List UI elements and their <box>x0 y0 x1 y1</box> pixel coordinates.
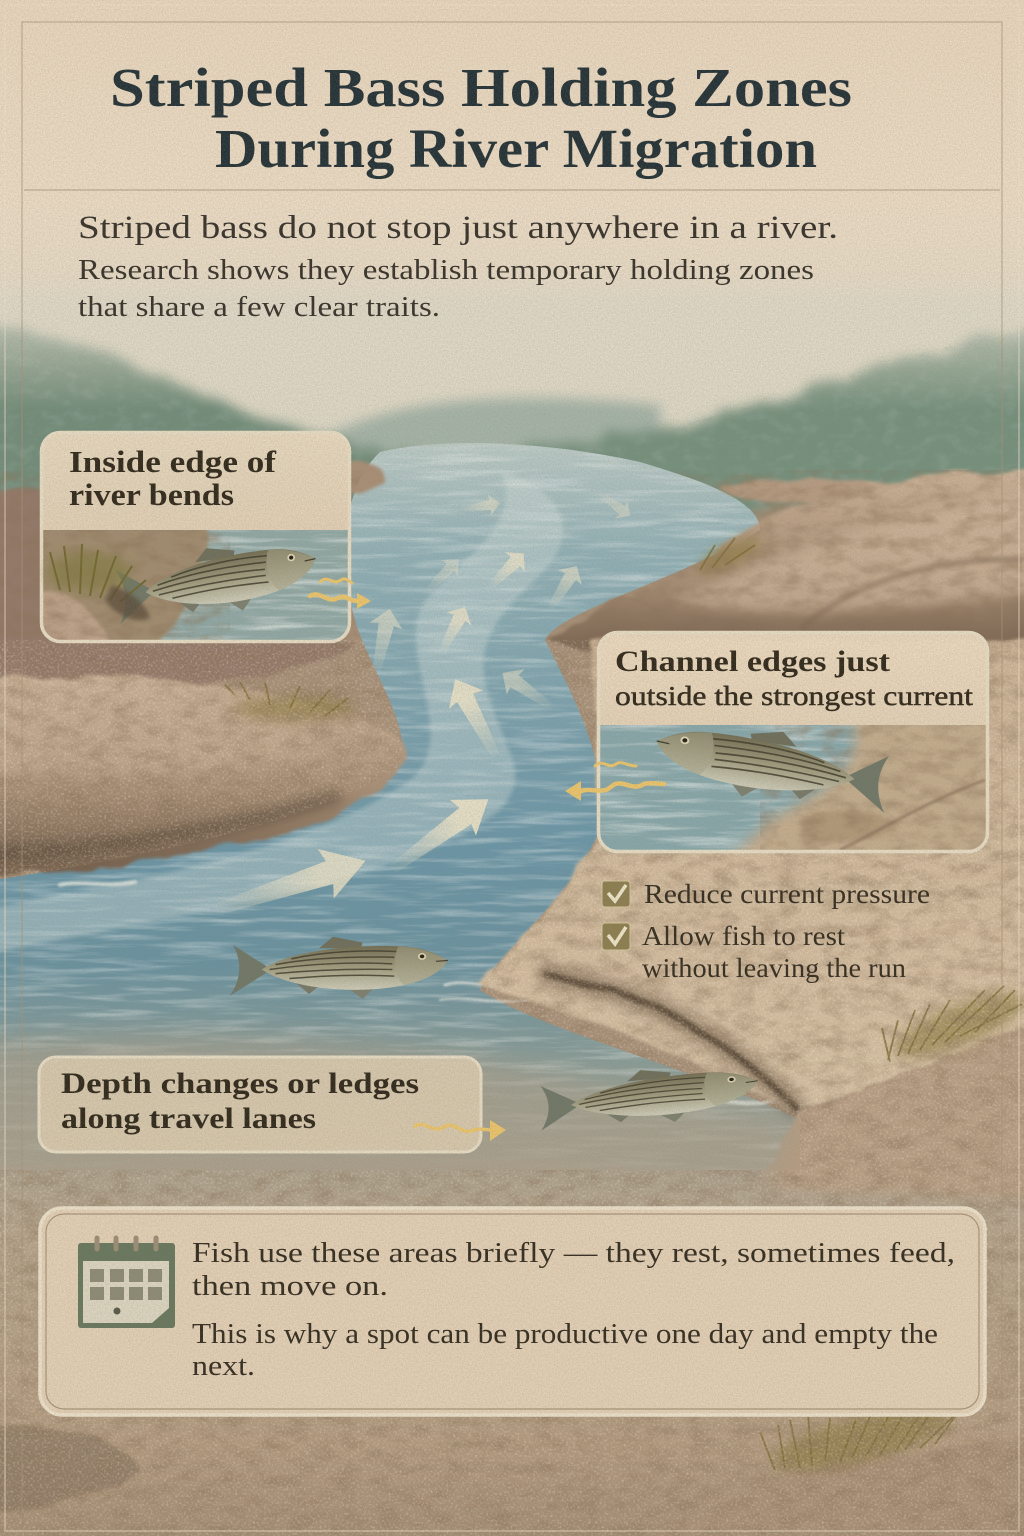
grass masses <box>235 531 1024 1483</box>
panel: fish use these areas briefly <box>40 1208 985 1415</box>
heading: Inside edge of <box>69 444 277 479</box>
panel: channel edges <box>596 630 990 854</box>
body text: This is why a spot can be productive one day and empty the <box>192 1319 938 1350</box>
panel: depth changes or ledges <box>39 1057 481 1152</box>
body text: then move on. <box>192 1270 388 1302</box>
forest: left hillside <box>0 320 420 530</box>
checklist: Allow fish to rest <box>642 921 846 951</box>
body text: next. <box>192 1351 255 1382</box>
far hills <box>320 397 660 455</box>
bottom left rock <box>0 1424 140 1510</box>
right rock highlights <box>670 500 1024 612</box>
icon: calendar <box>78 1238 175 1328</box>
fish <box>112 533 321 628</box>
left shore rock behind panel <box>0 490 355 690</box>
heading: Channel edges just <box>615 645 890 678</box>
left bank shadow <box>0 795 340 855</box>
intro text <box>78 210 838 323</box>
foam <box>60 882 775 1105</box>
river <box>0 443 800 1170</box>
title: Striped Bass Holding Zones <box>110 57 852 118</box>
checklist: without leaving the run <box>642 953 907 983</box>
body text <box>192 1237 955 1382</box>
icon: check box two <box>602 923 630 950</box>
right sandbar <box>478 640 1024 1112</box>
left bank rock <box>0 677 407 880</box>
small rocks upstream <box>720 477 880 504</box>
forest: right hillside <box>500 325 1024 510</box>
bottom right rock <box>620 1435 1024 1536</box>
arrow: wavy yellow, panel two <box>565 763 664 801</box>
intro text: that share a few clear traits. <box>78 291 440 323</box>
fish <box>651 715 894 817</box>
rock base <box>0 480 1024 1536</box>
lower shallows <box>0 1038 800 1210</box>
panel: depth changes or ledges: along travel lanes <box>61 1102 316 1135</box>
arrow: wavy yellow, panel three <box>415 1120 506 1141</box>
mist over forest <box>0 270 1024 410</box>
title: During River Migration <box>215 118 817 179</box>
small shore rock <box>335 461 386 494</box>
checklist <box>602 879 930 983</box>
title <box>110 57 852 179</box>
icon: check box one <box>602 881 630 907</box>
heading <box>69 444 277 512</box>
body text: Fish use these areas briefly — they rest, sometimes feed, <box>192 1237 955 1269</box>
arrow: wavy yellow, panel one <box>310 579 371 609</box>
intro text: Research shows they establish temporary holding zones <box>78 254 814 286</box>
heading <box>615 645 974 711</box>
panel: inside edge of river bends <box>40 430 352 644</box>
open water fish <box>230 937 448 999</box>
checklist: Reduce current pressure <box>644 879 930 909</box>
right rock fold <box>800 560 1024 630</box>
bottom sand <box>0 1156 1024 1536</box>
crevice shade <box>540 975 800 1112</box>
heading: outside the strongest current <box>615 681 974 711</box>
forest texture <box>2 346 1018 506</box>
lower right rock <box>720 1020 1024 1260</box>
dark crevice <box>545 975 800 1112</box>
grass tufts <box>225 538 1022 1470</box>
fish at ledge <box>537 1060 761 1134</box>
left bank highlight <box>0 699 330 775</box>
intro text: Striped bass do not stop just anywhere in a river. <box>78 210 838 246</box>
heading: river bends <box>69 477 234 512</box>
river streak texture <box>0 440 800 1170</box>
panel: depth changes or ledges: Depth changes or ledges <box>61 1067 419 1100</box>
grass over tail <box>46 544 150 620</box>
rock texture <box>0 470 1024 1536</box>
main current band <box>0 470 563 960</box>
flow arrows in the river <box>207 484 636 934</box>
right rocks <box>545 472 1024 665</box>
